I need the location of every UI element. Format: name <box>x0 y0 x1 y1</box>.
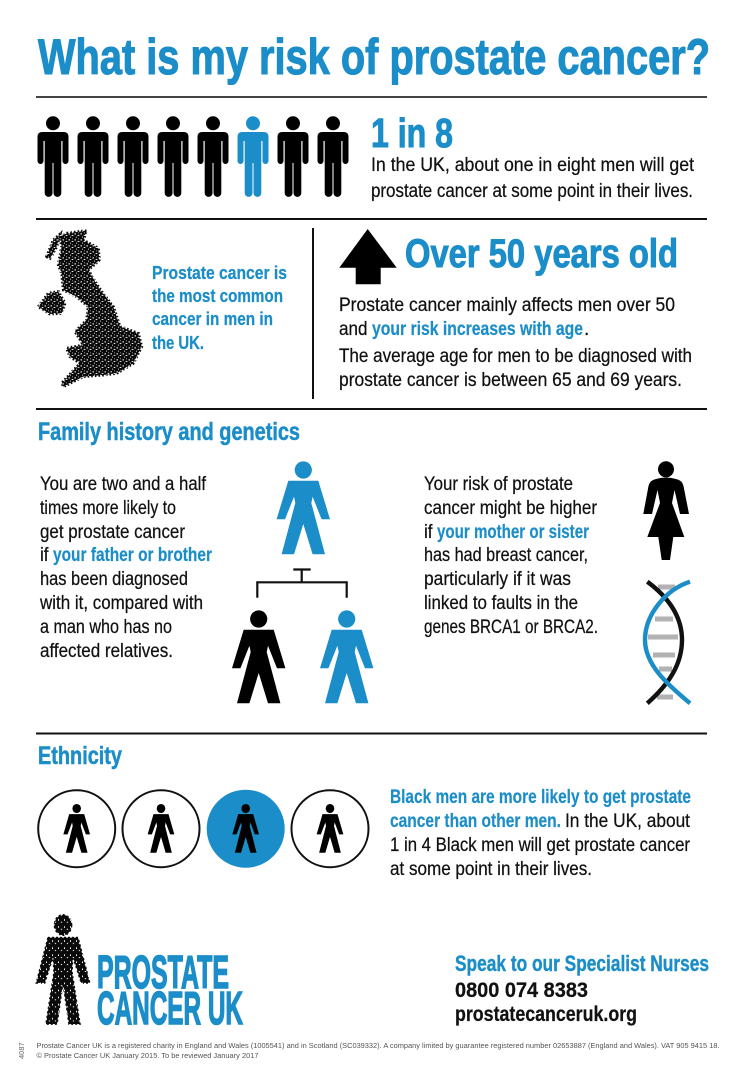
text: most common cancer: the most common <box>152 285 283 306</box>
text: age risk: your risk increases with age <box>372 319 583 340</box>
text: most common cancer: the UK. <box>152 332 204 353</box>
contact details: prostatecanceruk.org <box>455 1003 637 1026</box>
text: ethnicity risk: 1 in 4 Black men will get prostate cancer <box>390 835 691 856</box>
text: father or brother <box>39 474 212 662</box>
text: mother or sister <box>424 474 598 638</box>
heading: 1 in 8: 1 in 8 <box>371 110 453 156</box>
text: father or brother: get prostate cancer <box>40 522 186 543</box>
text: ethnicity risk <box>390 787 691 880</box>
text: age risk: . <box>584 319 589 340</box>
icon row: four circles with men <box>38 790 368 868</box>
text: one in eight men: In the UK, about one in eight men will get <box>371 155 695 176</box>
text: father or brother: has been diagnosed <box>40 569 188 590</box>
bracket <box>257 570 347 598</box>
icon: unaffected brother <box>232 610 285 703</box>
footer legal text <box>36 1041 720 1060</box>
contact details <box>455 951 709 1026</box>
icon: DNA helix <box>645 582 690 703</box>
text: one in eight men <box>371 155 695 202</box>
text: father or brother: You are two and a half <box>40 474 207 495</box>
text: ethnicity risk: cancer than other men. <box>390 811 561 832</box>
logo: Prostate Cancer UK <box>36 915 243 1034</box>
text: ethnicity risk: In the UK, about <box>565 811 691 832</box>
text: age risk: The average age for men to be diagnosed with <box>339 346 692 367</box>
text: mother or sister: linked to faults in the <box>424 593 578 614</box>
text: age risk: and <box>339 319 368 340</box>
icon: woman <box>643 461 689 560</box>
text: mother or sister: Your risk of prostate <box>424 474 573 495</box>
text: father or brother: affected relatives. <box>40 641 173 662</box>
text: ethnicity risk: at some point in their lives. <box>390 859 592 880</box>
text: father or brother: times more likely to <box>40 498 176 519</box>
text: most common cancer <box>152 262 287 353</box>
text: father or brother: if <box>40 545 49 566</box>
text: mother or sister: has had breast cancer, <box>424 545 588 566</box>
contact details: 0800 074 8383 <box>455 979 588 1002</box>
text: father or brother: your father or brother <box>53 545 212 566</box>
text: mother or sister: genes BRCA1 or BRCA2. <box>424 617 598 638</box>
text: mother or sister: particularly if it was <box>424 569 571 590</box>
text: age risk: Prostate cancer mainly affects men over 50 <box>339 295 675 316</box>
icon row: eight men, one in blue <box>38 116 348 197</box>
logo: Prostate Cancer UK: PROSTATE <box>97 946 229 998</box>
logo figure <box>36 915 90 1024</box>
diagram: family tree <box>232 461 373 703</box>
text: mother or sister: if <box>424 522 433 543</box>
text: mother or sister: cancer might be higher <box>424 498 598 519</box>
print code: 4087 <box>17 1042 26 1059</box>
heading: over 50 years old: Over 50 years old <box>405 232 678 276</box>
icon: up arrow <box>339 229 397 284</box>
logo: Prostate Cancer UK: CANCER UK <box>97 982 243 1034</box>
text: one in eight men: prostate cancer at some point in their lives. <box>371 181 693 202</box>
text: father or brother: a man who has no <box>40 617 172 638</box>
footer legal text: © Prostate Cancer UK January 2015. To be reviewed January 2017 <box>36 1051 258 1060</box>
icon: affected brother <box>320 610 373 703</box>
map of the UK <box>38 231 142 387</box>
text: mother or sister: your mother or sister <box>437 522 589 543</box>
footer legal text: Prostate Cancer UK is a registered charity in England and Wales (1005541) and in Scotland (SC039332). A company limited by guarantee registered number 02653887 (England and Wales). VAT 905 9415 18. <box>36 1041 720 1050</box>
text: father or brother: with it, compared with <box>39 593 203 614</box>
text: most common cancer: Prostate cancer is <box>152 262 287 283</box>
icon: father <box>277 461 330 554</box>
text: age risk: prostate cancer is between 65 and 69 years. <box>339 370 682 391</box>
heading: family history and genetics: Family history and genetics <box>38 418 300 446</box>
text: most common cancer: cancer in men in <box>152 308 273 329</box>
text: age risk <box>339 295 692 391</box>
heading: ethnicity: Ethnicity <box>38 742 122 770</box>
